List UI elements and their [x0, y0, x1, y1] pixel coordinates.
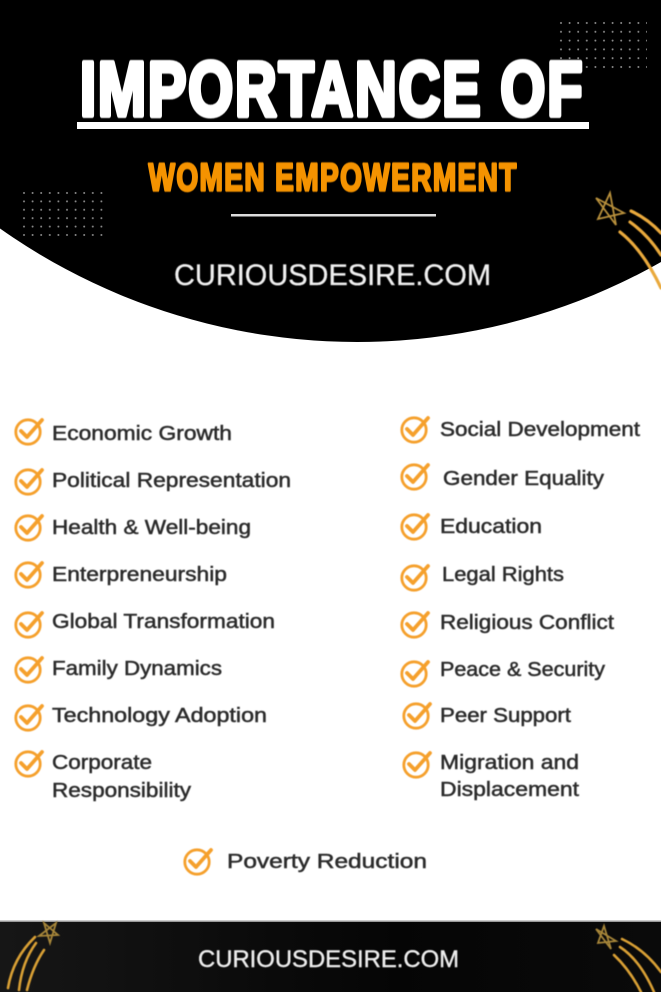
- icon: shooting star top right: [596, 193, 661, 288]
- panel: left benefits list: [16, 420, 291, 802]
- item: Technology Adoption: Technology Adoption: [52, 704, 267, 727]
- item: Global Transformation: [16, 610, 275, 637]
- item: Global Transformation: Global Transformation: [52, 610, 275, 633]
- item: Health & Well-being: Health & Well-being: [52, 516, 251, 539]
- dot pattern: top right: [559, 21, 647, 71]
- item: Corporate Responsibility: [16, 751, 192, 802]
- item: Education: [402, 515, 542, 539]
- item: Family Dynamics: Family Dynamics: [52, 657, 222, 680]
- icon: shooting star footer right: [596, 926, 661, 992]
- item: Religious Conflict: [402, 611, 614, 637]
- item: Poverty Reduction: [185, 850, 427, 874]
- item: Enterpreneurship: Enterpreneurship: [52, 563, 227, 586]
- header: black curved banner: [0, 0, 661, 342]
- item: Gender Equality: [402, 465, 605, 490]
- item: Peer Support: Peer Support: [440, 704, 571, 727]
- item: Migration and Displacement: [404, 751, 579, 801]
- title underline: [77, 122, 589, 129]
- item: Economic Growth: [16, 420, 232, 445]
- item: Family Dynamics: [16, 657, 222, 682]
- item: Poverty Reduction: Poverty Reduction: [227, 850, 427, 873]
- item: Corporate Responsibility: Corporate: [52, 751, 152, 774]
- dot pattern: left: [22, 191, 104, 237]
- item: Education: Education: [440, 515, 542, 538]
- item: Gender Equality: Gender Equality: [443, 467, 605, 490]
- icon: shooting star footer left: [8, 923, 58, 990]
- item: Legal Rights: Legal Rights: [442, 563, 564, 586]
- panel: right benefits list: [402, 418, 640, 801]
- item: Peace & Security: Peace & Security: [440, 658, 606, 681]
- item: Social Development: Social Development: [440, 418, 640, 441]
- item: Peer Support: [404, 704, 571, 728]
- item: Migration and Displacement: Migration and: [440, 751, 579, 774]
- subtitle: WOMEN EMPOWERMENT: [148, 156, 517, 200]
- website label: CURIOUSDESIRE.COM: [174, 259, 491, 292]
- item: Economic Growth: Economic Growth: [52, 422, 232, 445]
- item: Political Representation: Political Representation: [52, 469, 291, 492]
- footer bar: [0, 920, 661, 992]
- item: Legal Rights: [402, 563, 564, 590]
- subtitle divider: [231, 214, 436, 216]
- item: Technology Adoption: [16, 704, 267, 730]
- item: Religious Conflict: Religious Conflict: [440, 611, 614, 634]
- item: Corporate Responsibility: Responsibility: [52, 779, 192, 802]
- item: Peace & Security: [402, 658, 606, 686]
- title: IMPORTANCE OF: [80, 46, 582, 132]
- footer website label: CURIOUSDESIRE.COM: [198, 946, 459, 973]
- item: Migration and Displacement: Displacement: [440, 778, 579, 801]
